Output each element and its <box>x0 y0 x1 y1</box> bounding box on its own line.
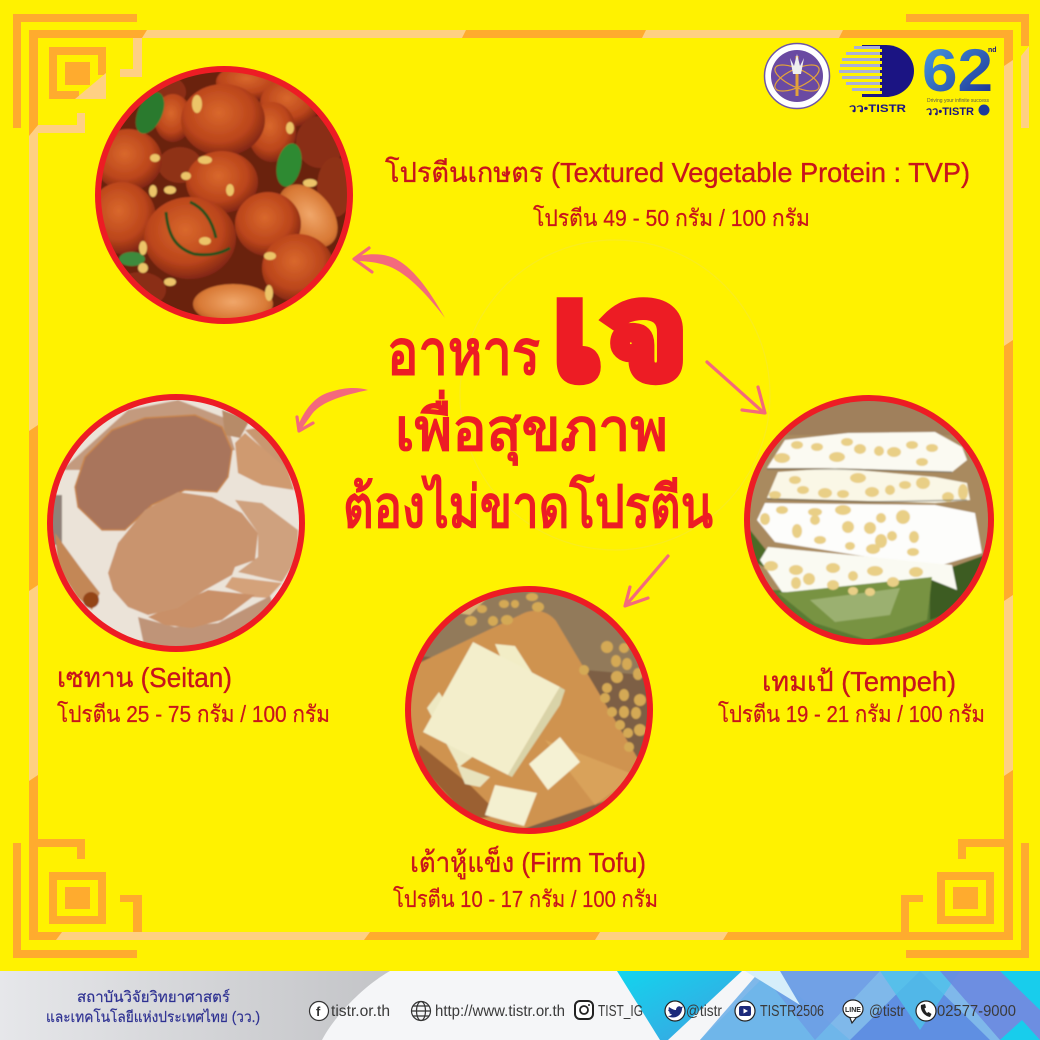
label: seitan <box>57 662 330 727</box>
title line 1: food: อาหาร <box>387 319 540 388</box>
label: seitan: เซทาน (Seitan) <box>57 662 232 693</box>
organisation name: และเทคโนโลยีแห่งประเทศไทย (วว.) <box>46 1008 260 1026</box>
contact: youtube: TISTR2506 <box>760 1003 824 1020</box>
logos <box>764 37 997 118</box>
top-left corner ornament light part <box>38 38 142 133</box>
arrow: to tempeh <box>707 362 765 413</box>
contact: phone: 02577-9000 <box>937 1003 1016 1020</box>
title line 3: ต้องไม่ขาดโปรตีน <box>343 472 713 540</box>
left bar <box>29 30 38 940</box>
photo: seitan <box>45 394 310 655</box>
footer grey swoosh <box>0 971 390 1040</box>
label: textured vegetable protein: โปรตีนเกษตร (Textured Vegetable Protein : TVP) <box>385 156 970 188</box>
footer <box>0 971 1040 1040</box>
logo: TISTR sphere: วว•TISTR <box>849 103 906 115</box>
photo: textured vegetable protein <box>88 64 355 325</box>
faint background circle <box>460 240 770 550</box>
contact: facebook: tistr.or.th <box>331 1003 390 1020</box>
contact: line: LINE <box>845 1007 861 1014</box>
title <box>343 259 713 540</box>
label: tempeh: เทมเป้ (Tempeh) <box>762 666 956 697</box>
photo: firm tofu <box>405 585 655 835</box>
logo: TISTR sphere <box>839 45 914 115</box>
logo: 62nd anniversary: วว•TISTR <box>926 106 974 118</box>
label: seitan: โปรตีน 25 - 75 กรัม / 100 กรัม <box>57 701 330 727</box>
label: firm tofu: เต้าหู้แข็ง (Firm Tofu) <box>410 845 646 880</box>
logo: TISTR seal <box>764 44 830 108</box>
logo: 62nd anniversary: nd <box>988 47 997 54</box>
contact: facebook: f <box>316 1004 321 1019</box>
contact: line <box>843 1000 906 1023</box>
bottom bar <box>29 932 1012 940</box>
contact: facebook <box>310 1002 390 1020</box>
label: textured vegetable protein: โปรตีน 49 - 50 กรัม / 100 กรัม <box>533 205 810 231</box>
contact: instagram: TIST_IG <box>598 1003 643 1020</box>
logo: 62nd anniversary: 62 <box>922 37 993 104</box>
footer background <box>0 971 1040 1040</box>
top-right light strip <box>1021 46 1029 128</box>
contact: youtube <box>735 1001 824 1021</box>
title: vegetarian mark: เจ <box>552 259 688 406</box>
arrow: to textured vegetable protein <box>354 248 445 318</box>
label: firm tofu <box>393 845 658 912</box>
bottom-left ornament inner <box>57 880 98 916</box>
photo: tempeh <box>744 395 995 650</box>
footer triangles <box>617 971 1040 1040</box>
right bar <box>1004 30 1013 940</box>
arrow: to seitan <box>297 388 368 431</box>
label: firm tofu: โปรตีน 10 - 17 กรัม / 100 กรัม <box>393 886 658 912</box>
logo: 62nd anniversary: Driving your infinite success <box>927 98 989 104</box>
label: textured vegetable protein <box>385 156 970 231</box>
contact: twitter: @tistr <box>686 1003 723 1020</box>
contact: twitter <box>665 1001 723 1021</box>
label: tempeh: โปรตีน 19 - 21 กรัม / 100 กรัม <box>718 701 985 727</box>
top-right corner ornament <box>906 14 1029 46</box>
contact: line: @tistr <box>869 1003 906 1020</box>
arrow: to firm tofu <box>625 556 668 606</box>
organisation name: สถาบันวิจัยวิทยาศาสตร์ <box>77 989 230 1006</box>
contact: phone <box>916 1001 1016 1021</box>
label: tempeh <box>718 666 985 727</box>
title line 2: เพื่อสุขภาพ <box>395 389 668 467</box>
bottom-right corner ornament <box>901 839 1029 958</box>
bottom-right ornament inner <box>945 880 986 916</box>
organisation name <box>46 989 260 1026</box>
contact: website: http://www.tistr.or.th <box>435 1003 565 1020</box>
contact: instagram <box>575 1001 643 1020</box>
top-left corner ornament <box>13 14 137 128</box>
top bar <box>29 30 1012 38</box>
bottom-left corner ornament <box>13 839 142 958</box>
